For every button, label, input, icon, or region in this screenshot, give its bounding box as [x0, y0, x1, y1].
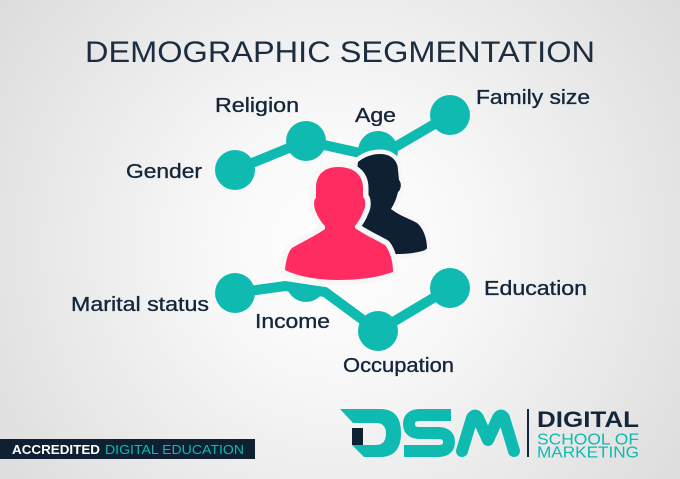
logo mark: D	[340, 409, 401, 457]
logo divider	[527, 409, 529, 457]
label: Marital status: Marital status	[71, 294, 209, 316]
logo text: DIGITAL: DIGITAL	[537, 407, 639, 432]
top line chart	[215, 95, 470, 190]
logo mark: S	[404, 415, 451, 451]
label: Religion: Religion	[215, 95, 299, 117]
logo text: SCHOOL OF: SCHOOL OF	[537, 432, 639, 448]
banner: accredited digital education: DIGITAL EDUCATION	[105, 442, 244, 457]
logo: DSM	[340, 407, 639, 462]
label: Age: Age	[355, 105, 396, 127]
logo mark: M	[462, 416, 514, 451]
banner: accredited digital education	[0, 439, 255, 459]
label: Income: Income	[255, 311, 330, 333]
label: Education: Education	[484, 278, 587, 300]
banner: accredited digital education: ACCREDITED	[12, 442, 100, 457]
bottom line chart	[215, 262, 470, 351]
icon: people	[285, 154, 427, 280]
title: DEMOGRAPHIC SEGMENTATION	[85, 36, 595, 69]
logo mark: D square	[352, 428, 363, 445]
label: Occupation: Occupation	[343, 355, 454, 377]
icon: navy person	[350, 154, 427, 256]
icon: pink person	[285, 167, 393, 280]
logo text: MARKETING: MARKETING	[537, 444, 639, 462]
label: Family size: Family size	[476, 87, 590, 109]
label: Gender: Gender	[126, 161, 202, 183]
